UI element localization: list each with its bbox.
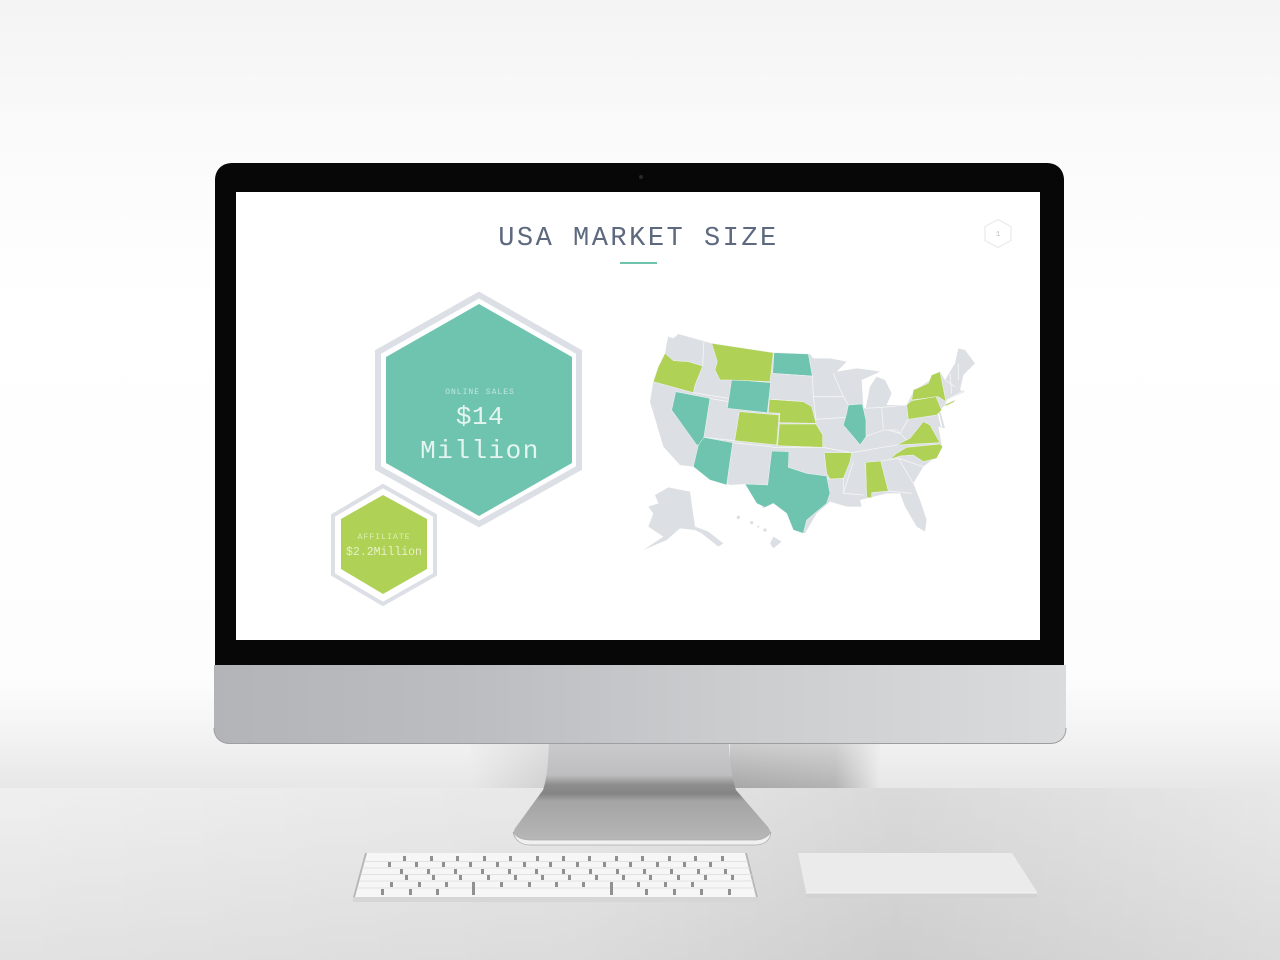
- webcam: [639, 175, 643, 179]
- affiliate value: $2.2Million: [346, 546, 422, 559]
- monitor bezel: [215, 163, 1064, 665]
- alaska: [643, 487, 723, 550]
- wall shadow behind stand: [470, 744, 880, 789]
- online sales value: $14: [456, 402, 504, 432]
- states in green: [653, 343, 955, 498]
- key rows: [358, 862, 755, 888]
- online sales label: ONLINE SALES: [445, 388, 515, 397]
- slide screen: [236, 192, 1040, 640]
- key gaps: [381, 856, 734, 895]
- monitor stand: [513, 744, 771, 845]
- page number badge: [985, 220, 1011, 248]
- keyboard: [353, 853, 758, 902]
- monitor chin: [214, 665, 1066, 744]
- state borders: [693, 340, 965, 495]
- affiliate label: AFFILIATE: [357, 532, 411, 542]
- page number badge: 1: [996, 231, 1000, 239]
- states in teal: [672, 353, 866, 533]
- desk surface: [0, 788, 1280, 960]
- panel: online sales hexagon: [378, 295, 579, 524]
- trackpad: [798, 853, 1037, 898]
- title underline: [620, 262, 657, 264]
- online sales unit: Million: [420, 436, 540, 466]
- map of USA: [643, 334, 975, 550]
- title: USA MARKET SIZE: [498, 224, 779, 254]
- panel: affiliate hexagon: [333, 486, 435, 604]
- contiguous states base: [650, 334, 975, 533]
- hawaii: [737, 516, 782, 548]
